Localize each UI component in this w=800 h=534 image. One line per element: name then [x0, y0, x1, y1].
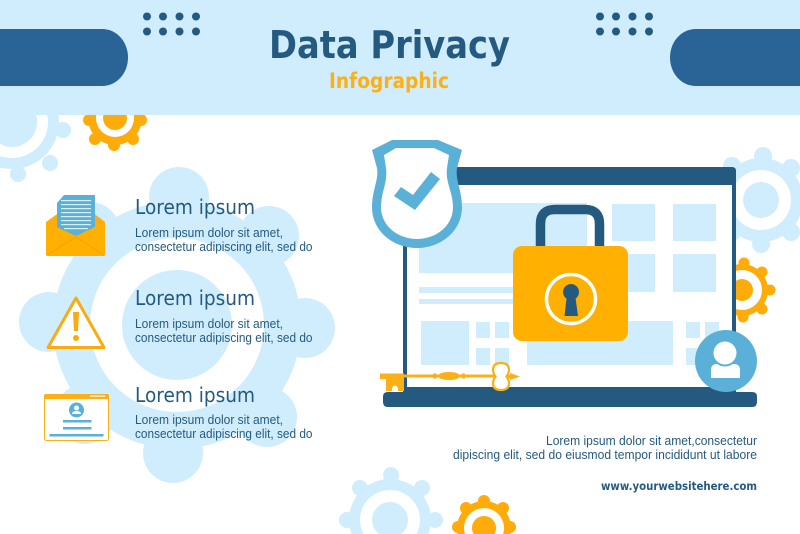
- text block 3: consectetur adipiscing elit, sed do: [135, 427, 313, 441]
- icon: warning triangle: [48, 298, 104, 348]
- gear: top orange: [83, 91, 147, 151]
- text block 2: Lorem ipsum dolor sit amet,: [135, 317, 283, 331]
- description text: dipiscing elit, sed do eiusmod tempor incididunt ut labore: [453, 448, 757, 462]
- screen frame: [403, 185, 407, 390]
- screen tiles: [419, 203, 719, 365]
- text block 3: [135, 383, 313, 441]
- icon: login card: [44, 394, 109, 440]
- header pill left: [0, 29, 128, 86]
- website url: www.yourwebsitehere.com: [601, 479, 757, 493]
- text block 2: consectetur adipiscing elit, sed do: [135, 331, 313, 345]
- gear: right orange: [716, 258, 776, 322]
- icon: envelope with document: [46, 195, 105, 256]
- description text: [453, 434, 757, 462]
- gear: right light: [719, 147, 800, 253]
- dots right: [596, 12, 653, 36]
- title: Data Privacy: [269, 23, 510, 67]
- text block 3: Lorem ipsum: [135, 383, 255, 407]
- text block 1: Lorem ipsum dolor sit amet,: [135, 226, 283, 240]
- laptop: [383, 167, 757, 407]
- text block 2: [135, 286, 313, 345]
- header band: [0, 0, 800, 115]
- text block 1: Lorem ipsum: [135, 195, 255, 219]
- header pill right: [670, 29, 800, 86]
- subtitle: Infographic: [329, 69, 449, 93]
- text block 1: [135, 195, 313, 254]
- text block 3: Lorem ipsum dolor sit amet,: [135, 413, 283, 427]
- text block 2: Lorem ipsum: [135, 286, 255, 310]
- gear: bottom light: [339, 467, 443, 534]
- gear: top-left light: [0, 75, 71, 182]
- text block 1: consectetur adipiscing elit, sed do: [135, 240, 313, 254]
- icon: padlock: [513, 210, 628, 341]
- gear: large background gear: [19, 167, 335, 483]
- laptop screen: [403, 167, 736, 392]
- icon: shield with check: [372, 140, 462, 248]
- gear: bottom orange: [452, 495, 516, 534]
- screen top bar: [403, 167, 736, 185]
- laptop base: [383, 387, 757, 407]
- icon: key: [380, 363, 520, 391]
- icon: user avatar: [695, 330, 757, 392]
- description text: Lorem ipsum dolor sit amet,consectetur: [546, 434, 757, 448]
- dots left: [143, 12, 200, 36]
